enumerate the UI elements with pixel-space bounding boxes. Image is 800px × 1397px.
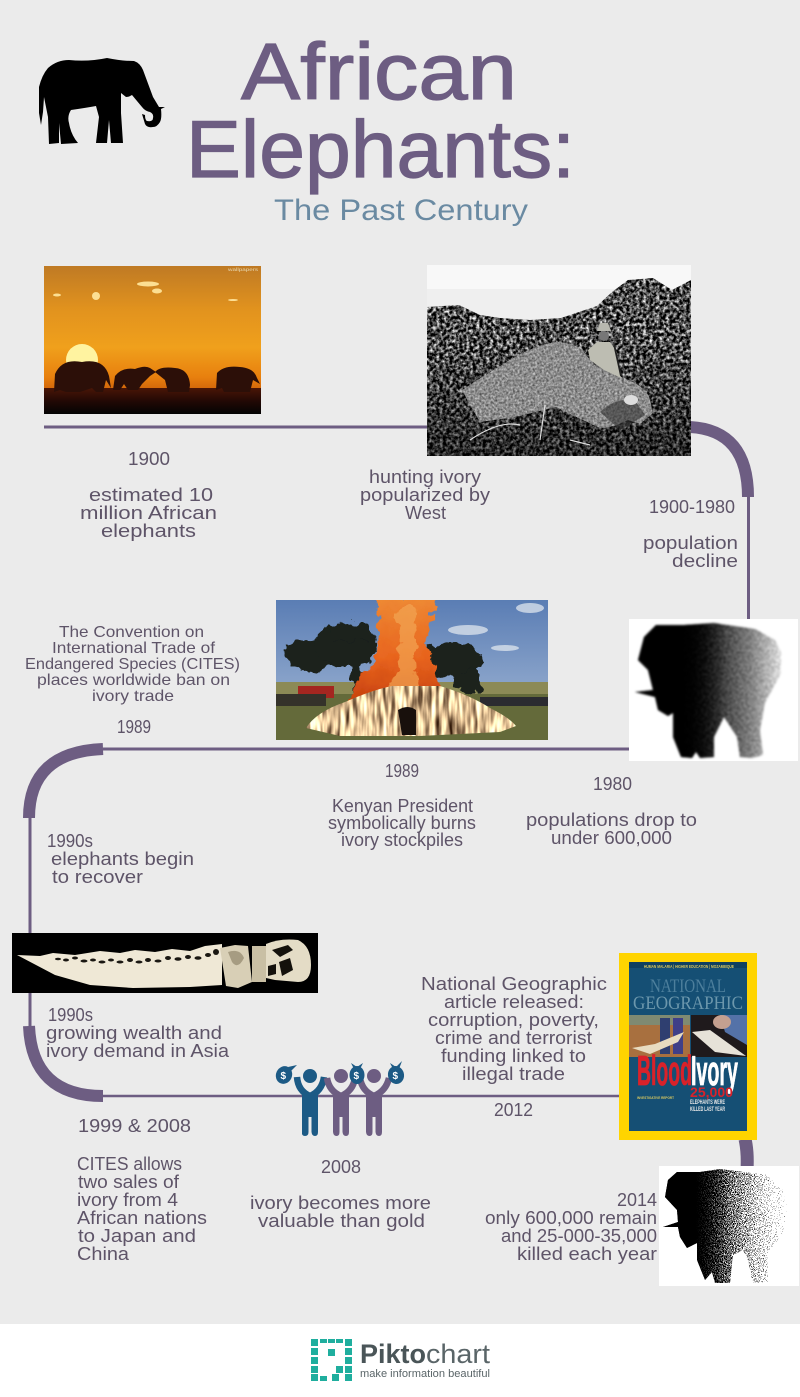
text: 1900-1980: population <box>643 533 738 553</box>
text: 2014: only 600,000 remain <box>485 1208 657 1228</box>
watermark: wallpapers <box>228 267 259 272</box>
Piktochart logo <box>311 1339 491 1381</box>
text: hunting ivory <box>360 467 490 523</box>
text: 2008: 2008 <box>321 1157 361 1177</box>
text: National Geographic article <box>421 974 607 1120</box>
flames <box>350 596 442 700</box>
text: Convention on International Trade: International Trade of <box>52 640 216 657</box>
text: 1999 and 2008: CITES allows <box>77 1154 182 1174</box>
text: 2008: ivory becomes more <box>250 1193 431 1213</box>
Piktochart logo: chart <box>426 1339 491 1369</box>
heading: Elephants: Elephants: <box>186 105 575 195</box>
text: 1999 and 2008: to Japan and <box>78 1226 196 1246</box>
text: 2014: and 25-000-35,000 <box>501 1226 657 1246</box>
text: 1980: 1980 <box>593 774 632 794</box>
subtitle: The Past Century <box>274 194 528 227</box>
text: 1990s recover <box>47 831 194 887</box>
text: 1900-1980: decline <box>672 551 738 571</box>
text: National Geographic article: article released: <box>444 992 584 1012</box>
text: 1980 <box>526 774 697 848</box>
text: Kenyan President <box>328 761 476 850</box>
text: 1990s demand <box>46 1005 230 1061</box>
text: Convention on International Trade: ivory trade <box>92 688 174 705</box>
magazine cover: National Geographic: 25,000 <box>690 1084 733 1100</box>
text: 1900: 1900 <box>128 449 170 469</box>
magazine cover: National Geographic: Blood <box>637 1047 692 1094</box>
text: 1980: under 600,000 <box>551 828 672 848</box>
icon: people holding money bags <box>273 1061 406 1136</box>
text: National Geographic article: funding linked to <box>441 1046 586 1066</box>
text: 2014: killed each year <box>517 1244 657 1264</box>
logo tagline: make information beautiful <box>360 1368 490 1380</box>
text: Kenyan President: 1989 <box>385 761 419 781</box>
text: 1990s demand: 1990s <box>48 1005 93 1025</box>
text: 1999 and 2008: 1999 & 2008 <box>78 1116 191 1136</box>
photo: burning ivory stockpile <box>276 596 548 740</box>
text: 1990s demand: growing wealth and <box>46 1023 222 1043</box>
magazine cover: National Geographic: KILLED LAST YEAR <box>690 1107 725 1113</box>
tusk pile <box>306 686 516 736</box>
text: 1900: elephants <box>101 521 196 541</box>
cover photo: carver <box>691 1015 747 1057</box>
magazine cover: National Geographic <box>619 953 757 1140</box>
heading: African: African <box>241 27 517 116</box>
text: 1999 and 2008 <box>77 1116 207 1264</box>
logo mark <box>311 1339 352 1381</box>
photo: hunter with elephant <box>427 265 691 456</box>
text: National Geographic article: 2012 <box>494 1100 533 1120</box>
magazine cover: National Geographic: Ivory <box>691 1047 738 1094</box>
text: Convention on International Trade: places worldwide ban on <box>37 672 230 689</box>
money bag middle: $ <box>354 1071 360 1082</box>
text: 2014 <box>485 1190 657 1264</box>
text: National Geographic article: crime and terrorist <box>435 1028 592 1048</box>
text: 2014: 2014 <box>617 1190 657 1210</box>
person: purple middle <box>327 1069 355 1136</box>
image: dissolving elephant, 2014 <box>659 1166 799 1286</box>
text: hunting ivory: popularized by <box>360 485 490 505</box>
timeline line and curves <box>29 427 748 1170</box>
magazine cover: National Geographic: ELEPHANTS WERE <box>690 1100 725 1106</box>
photo: carved ivory knife <box>12 933 318 993</box>
text: Convention on International Trade: Endangered Species (CITES) <box>25 656 240 673</box>
person: blue <box>297 1069 324 1136</box>
text: Kenyan President: ivory stockpiles <box>341 830 463 850</box>
footer band <box>0 1324 800 1397</box>
text: 1990s demand: ivory demand in Asia <box>46 1041 230 1061</box>
text: 1999 and 2008: China <box>77 1244 130 1264</box>
cover photo: men with tusk <box>629 1015 690 1057</box>
text: National Geographic article: illegal trade <box>462 1064 565 1084</box>
text: Convention on International Trade: 1989 <box>117 717 151 737</box>
text: Convention on International Trade <box>25 624 240 737</box>
text: 1990s recover: elephants begin <box>51 849 194 869</box>
image: fading elephant, 1980 <box>629 619 798 761</box>
hunter figure <box>588 323 621 378</box>
person: purple right <box>360 1069 389 1136</box>
text: 1980: populations drop to <box>526 810 697 830</box>
text: 1900: estimated 10 <box>89 485 213 505</box>
magazine cover: National Geographic: HUMAN MALARIA | HIGHER EDUCATION | MOZAMBIQUE <box>644 964 734 969</box>
text: National Geographic article: corruption, poverty, <box>428 1010 599 1030</box>
magazine cover: National Geographic: NATIONAL <box>650 976 726 997</box>
text: National Geographic article: National Geographic <box>421 974 607 994</box>
title block <box>186 27 575 227</box>
logo wordmark: Pikto <box>360 1339 426 1369</box>
text: hunting ivory: West <box>405 503 446 523</box>
text: 1990s recover: to recover <box>52 867 143 887</box>
text: 2008 <box>250 1157 431 1231</box>
photo: elephants at sunset <box>44 266 261 414</box>
crowd <box>276 686 548 706</box>
magazine cover: National Geographic: INVESTIGATIVE REPORT <box>637 1095 674 1100</box>
trees <box>284 622 482 694</box>
text: 1900: million African <box>80 503 217 523</box>
text: 1900 <box>80 449 217 541</box>
magazine cover: National Geographic: GEOGRAPHIC <box>633 993 743 1014</box>
text: 1999 and 2008: African nations <box>77 1208 207 1228</box>
money bag right: $ <box>392 1071 398 1082</box>
icon: elephant silhouette <box>39 58 165 144</box>
text: Kenyan President: Kenyan President <box>332 796 473 816</box>
text: 1990s recover: 1990s <box>47 831 93 851</box>
money bag left: $ <box>280 1071 286 1082</box>
text: Convention on International Trade: The Convention on <box>59 624 204 641</box>
text: 1900-1980 <box>643 497 738 571</box>
text: hunting ivory: hunting ivory <box>369 467 481 487</box>
text: 2008: valuable than gold <box>258 1211 425 1231</box>
text: 1999 and 2008: two sales of <box>78 1172 180 1192</box>
text: 1999 and 2008: ivory from 4 <box>77 1190 178 1210</box>
text: Kenyan President: symbolically burns <box>328 813 476 833</box>
text: 1900-1980: 1900-1980 <box>649 497 735 517</box>
